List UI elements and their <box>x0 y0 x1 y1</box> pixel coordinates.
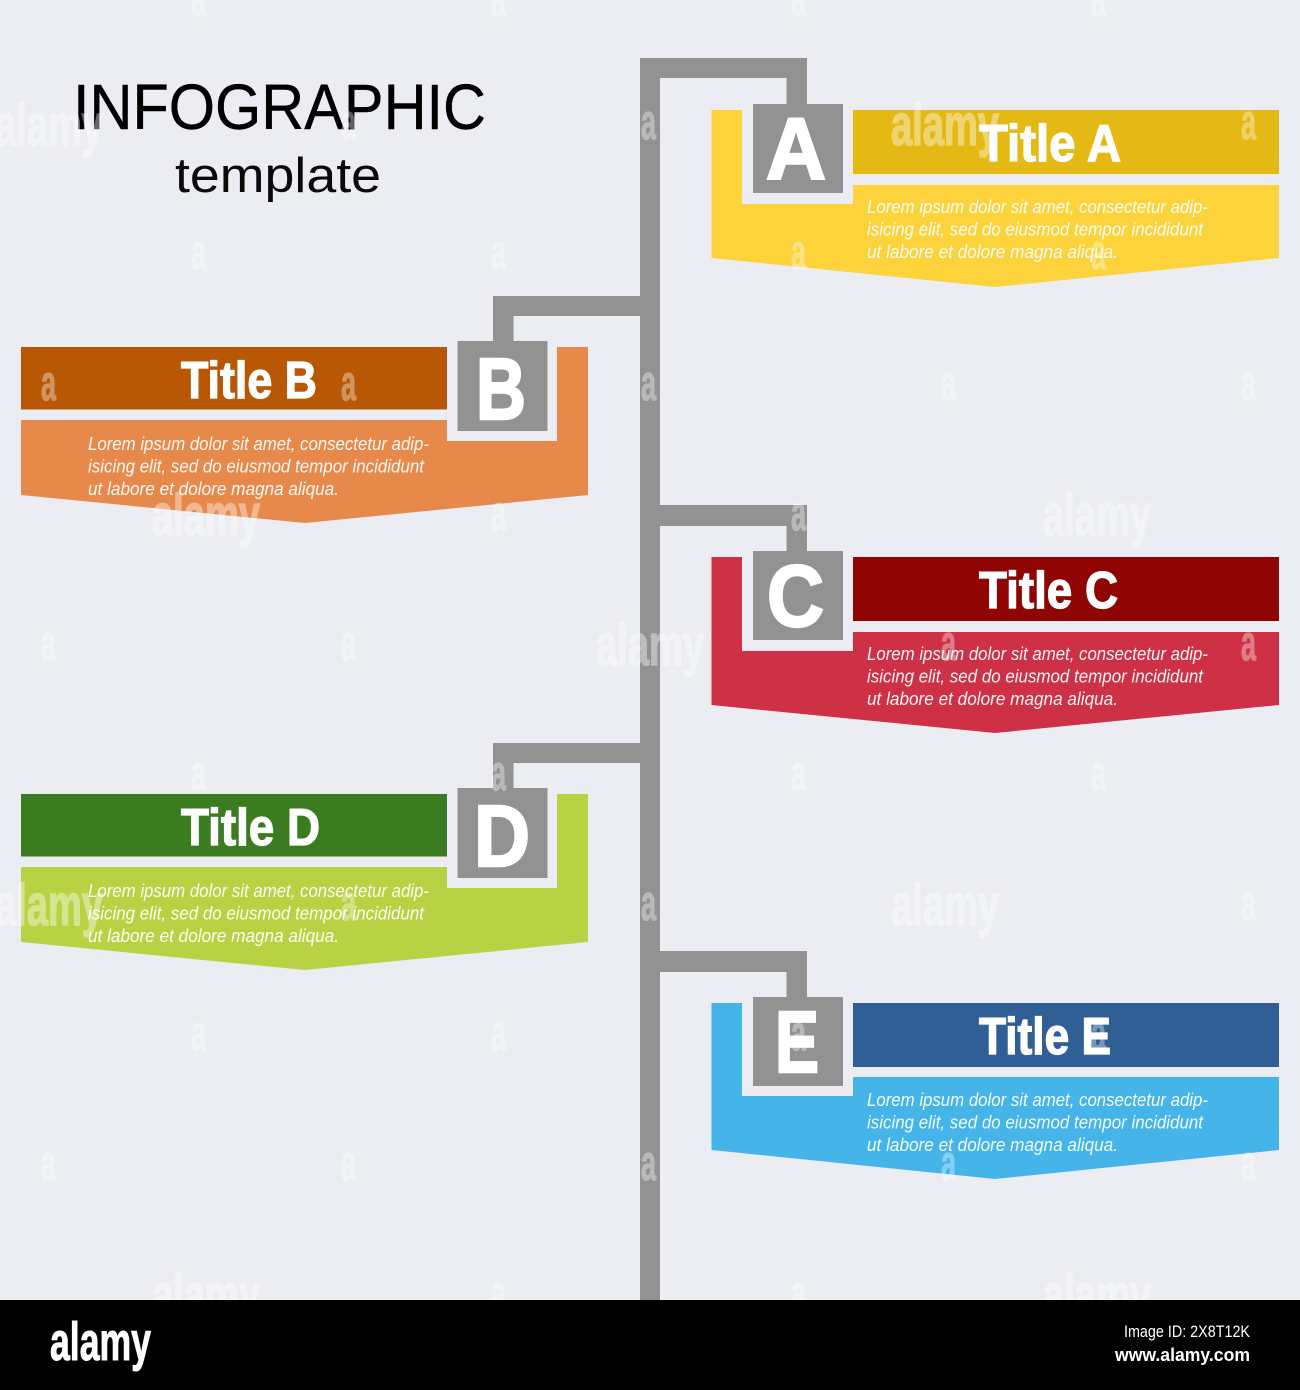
watermark pattern: a <box>941 355 957 411</box>
watermark pattern: a <box>941 1135 957 1191</box>
watermark pattern: a <box>491 1005 507 1061</box>
watermark pattern: a <box>341 355 357 411</box>
connector tree: trunk and branches <box>493 58 807 1300</box>
watermark pattern: a <box>641 1135 657 1191</box>
footer bar: alamy <box>50 1312 151 1372</box>
watermark pattern: a <box>641 875 657 931</box>
panel: C: C <box>767 548 824 645</box>
panel: A: ut labore et dolore magna aliqua. <box>867 241 1118 262</box>
footer bar <box>0 1300 1300 1390</box>
watermark pattern: a <box>41 615 57 671</box>
watermark pattern: a <box>941 615 957 671</box>
watermark pattern: a <box>341 94 357 150</box>
panel: D <box>21 788 588 970</box>
watermark pattern: a <box>191 745 207 801</box>
watermark pattern: a <box>791 485 807 541</box>
panel: B: Title B <box>181 352 317 410</box>
watermark pattern: a <box>1241 94 1257 150</box>
watermark pattern: a <box>491 485 507 541</box>
watermark pattern: a <box>191 224 207 280</box>
panel: C: Title C <box>979 562 1118 620</box>
panel: D: D <box>474 788 530 885</box>
panel: E: isicing elit, sed do eiusmod tempor incididunt <box>867 1112 1204 1132</box>
watermark pattern: alamy <box>596 613 704 678</box>
watermark pattern: a <box>641 94 657 150</box>
panel: A: Lorem ipsum dolor sit amet, consectetur adip- <box>867 196 1208 217</box>
watermark pattern: alamy <box>891 93 999 158</box>
panel: C: ut labore et dolore magna aliqua. <box>867 688 1118 709</box>
watermark pattern: a <box>791 1005 807 1061</box>
panel: B <box>21 341 588 523</box>
watermark pattern: a <box>1241 355 1257 411</box>
panel: B: Lorem ipsum dolor sit amet, consectetur adip- <box>88 433 429 454</box>
watermark pattern: a <box>341 615 357 671</box>
watermark pattern: alamy <box>1043 1263 1151 1328</box>
watermark pattern: alamy <box>152 483 260 548</box>
watermark pattern: a <box>41 355 57 411</box>
watermark pattern: a <box>1091 1005 1107 1061</box>
panel: E: E <box>775 994 819 1091</box>
panel: D: Title D <box>181 799 320 857</box>
panel: C: Lorem ipsum dolor sit amet, consectetur adip- <box>867 643 1208 664</box>
watermark pattern: a <box>1241 615 1257 671</box>
watermark pattern: a <box>1091 745 1107 801</box>
watermark pattern: a <box>1241 875 1257 931</box>
panel: D: Lorem ipsum dolor sit amet, consectetur adip- <box>88 880 429 901</box>
panel: A <box>712 101 1279 287</box>
panel: C <box>712 548 1279 733</box>
panel: B: B <box>476 341 526 438</box>
panel: A: A <box>766 101 826 198</box>
watermark pattern: a <box>1241 1135 1257 1191</box>
watermark pattern: a <box>191 1005 207 1061</box>
heading: INFOGRAPHIC template: INFOGRAPHIC <box>73 71 486 143</box>
watermark pattern: a <box>341 875 357 931</box>
watermark pattern: a <box>1091 224 1107 280</box>
watermark pattern: a <box>491 224 507 280</box>
watermark pattern: a <box>341 1135 357 1191</box>
heading: INFOGRAPHIC template: template <box>175 149 381 203</box>
footer bar: www.alamy.com <box>1114 1345 1250 1365</box>
panel: B: isicing elit, sed do eiusmod tempor incididunt <box>88 456 425 476</box>
watermark pattern: alamy <box>152 1263 260 1328</box>
watermark pattern: a <box>791 745 807 801</box>
panel: E <box>712 994 1279 1179</box>
watermark pattern: a <box>791 224 807 280</box>
panel: A: Title A <box>979 115 1121 173</box>
panel: E: ut labore et dolore magna aliqua. <box>867 1134 1118 1155</box>
heading: INFOGRAPHIC template <box>73 71 486 203</box>
watermark pattern: alamy <box>891 873 999 938</box>
panel: E: Lorem ipsum dolor sit amet, consectetur adip- <box>867 1089 1208 1110</box>
watermark pattern: a <box>791 1265 807 1321</box>
panel: D: isicing elit, sed do eiusmod tempor incididunt <box>88 902 425 924</box>
panel: E: Title E <box>979 1008 1111 1066</box>
panel: B: ut labore et dolore magna aliqua. <box>88 478 339 499</box>
panel: D: ut labore et dolore magna aliqua. <box>88 925 339 946</box>
panel: A: isicing elit, sed do eiusmod tempor incididunt <box>867 218 1204 240</box>
footer bar: Image ID: 2X8T12K <box>1124 1322 1251 1341</box>
watermark pattern: a <box>491 1265 507 1321</box>
watermark pattern: a <box>641 355 657 411</box>
watermark pattern: alamy <box>1043 483 1151 548</box>
watermark pattern: a <box>491 745 507 801</box>
panel: C: isicing elit, sed do eiusmod tempor incididunt <box>867 666 1204 686</box>
watermark pattern: a <box>41 1135 57 1191</box>
